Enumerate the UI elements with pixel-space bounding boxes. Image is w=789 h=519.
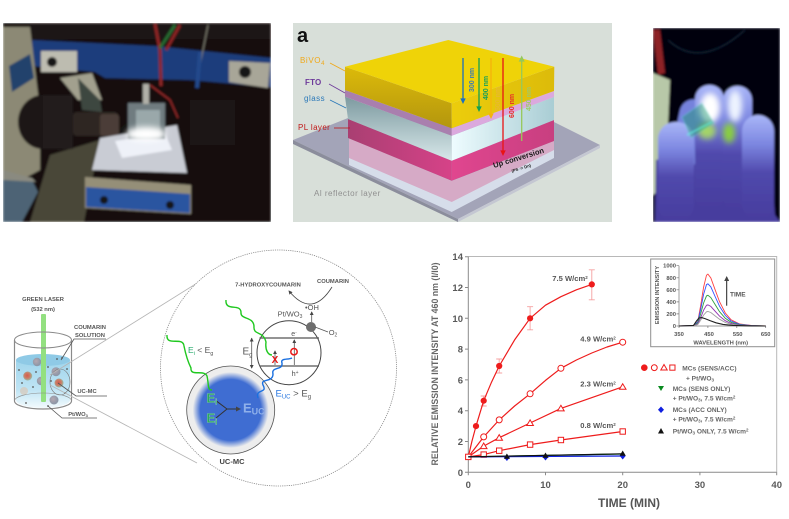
label: Ei less than Eg: E bbox=[188, 345, 195, 357]
inset y ticks: 200 bbox=[666, 312, 676, 318]
legend: , 7.5 W/cm bbox=[701, 396, 733, 402]
reflection of stack bbox=[349, 138, 554, 212]
y axis ticks: 12 bbox=[452, 283, 463, 294]
label: EUC greater than Eg: E bbox=[276, 388, 291, 400]
UC-MC microcapsule: i bbox=[215, 418, 217, 426]
series labels: 0.8 W/cm bbox=[580, 421, 613, 430]
inset x ticks: 550 bbox=[733, 332, 743, 338]
series: 4.9 W/cm2 bbox=[468, 339, 626, 457]
label: Pt/WO3: Pt/WO bbox=[278, 310, 300, 318]
x axis title: TIME (MIN) bbox=[598, 496, 660, 510]
photo: gloved hand with glowing film bbox=[653, 28, 780, 222]
Pt/WO3 particle with bands bbox=[242, 312, 328, 385]
UC-MC microcapsule: i bbox=[215, 398, 217, 406]
series labels: 7.5 W/cm bbox=[552, 274, 585, 283]
panel letter a: a bbox=[297, 25, 309, 47]
legend: 3 bbox=[698, 398, 701, 402]
y axis ticks: 14 bbox=[452, 252, 464, 263]
inset spectra curves bbox=[679, 274, 766, 326]
label: Ei less than Eg: < E bbox=[195, 345, 211, 355]
series labels: 2 bbox=[585, 275, 588, 280]
legend: MCs (SENS ONLY) bbox=[673, 386, 730, 393]
label: FTO: FTO bbox=[305, 78, 321, 87]
red O bbox=[291, 348, 297, 355]
x axis ticks: 20 bbox=[617, 480, 628, 491]
zoom projection lines bbox=[50, 280, 202, 463]
series labels: 2 bbox=[613, 336, 616, 340]
Pt/WO3 particle with bands: - bbox=[295, 330, 297, 335]
line chart: relative emission intensity bbox=[430, 252, 782, 510]
glass outline bbox=[14, 332, 72, 409]
chart frame and axes bbox=[465, 256, 777, 475]
legend: 3 bbox=[711, 378, 714, 382]
UC-MC microcapsule: E bbox=[243, 400, 252, 416]
label: time: TIME bbox=[730, 292, 746, 298]
label: EUC greater than Eg: g bbox=[308, 394, 311, 400]
label: green laser bbox=[22, 297, 65, 313]
x axis ticks: 40 bbox=[771, 480, 782, 491]
inset y ticks bbox=[663, 264, 676, 330]
inset y ticks: 0 bbox=[673, 324, 676, 330]
arrows: wavelength bbox=[461, 57, 524, 154]
label: coumarin: COUMARIN bbox=[317, 279, 349, 285]
label: coumarin solution: COUMARIN bbox=[74, 325, 106, 331]
magnified circle: mechanism bbox=[160, 250, 396, 486]
legend: ONLY, 7.5 W/cm bbox=[695, 428, 746, 436]
arrow labels: 400 nm bbox=[483, 76, 490, 100]
Pt/WO3 particle with bands: e bbox=[291, 331, 295, 338]
photo: laser cell setup on hot plate bbox=[3, 23, 271, 222]
legend: + Pt/WO bbox=[673, 416, 698, 424]
label: Al reflector layer: Al reflector layer bbox=[314, 189, 381, 198]
legend: 2 bbox=[733, 394, 736, 400]
y axis ticks: 6 bbox=[458, 376, 463, 386]
series labels: 2 bbox=[613, 380, 616, 386]
inset x ticks: 450 bbox=[704, 332, 714, 338]
label: 7-hydroxycoumarin: 7-HYDROXYCOUMARIN bbox=[235, 282, 301, 288]
legend: 2 bbox=[733, 416, 736, 420]
microcapsule particles bbox=[18, 357, 68, 407]
y axis title: RELATIVE EMISSION INTENSITY AT 460 nm (I/I0) bbox=[430, 262, 440, 466]
legend: 3 bbox=[692, 430, 695, 436]
wavy green beam to UC-MC bbox=[167, 335, 212, 390]
legend: Pt/WO bbox=[673, 428, 692, 436]
label: UC-MC: UC-MC bbox=[220, 457, 245, 466]
legend: + Pt/WO bbox=[686, 376, 711, 382]
green laser beam bbox=[41, 314, 46, 402]
legend bbox=[641, 364, 749, 436]
legend: , 7.5 W/cm bbox=[701, 416, 733, 424]
inset emission spectra chart bbox=[651, 259, 775, 347]
wavy green beam to Pt/WO3 bbox=[226, 300, 272, 355]
label: Ei less than Eg: g bbox=[210, 351, 213, 357]
time arrow bbox=[726, 277, 728, 306]
arrow labels: 450 nm bbox=[526, 87, 533, 111]
series labels: 2 bbox=[613, 422, 616, 427]
Pt/WO3 particle with bands: + bbox=[296, 370, 299, 376]
series labels: 2.3 W/cm bbox=[580, 380, 613, 388]
panel a: layered device diagram bbox=[293, 23, 612, 222]
label: up conversion: Up conversion bbox=[492, 146, 545, 170]
label: Pt/WO3: 3 bbox=[300, 314, 303, 320]
label: green laser: (532 nm) bbox=[31, 307, 55, 313]
series: 0.8 W/cm2 bbox=[466, 429, 625, 460]
leader lines bbox=[329, 63, 350, 128]
series: 2.3 W/cm2 bbox=[468, 384, 626, 457]
UC-MC microcapsule: E bbox=[206, 410, 215, 426]
label: PS to Dn: (PS -> Dn) bbox=[511, 163, 532, 173]
y axis ticks: 2 bbox=[458, 437, 463, 448]
UC-MC microcapsule: E bbox=[206, 390, 215, 406]
inset x ticks: 650 bbox=[761, 332, 771, 338]
Pt/WO3 particle with bands: h bbox=[291, 369, 296, 378]
Pt/WO3 particle with bands: g bbox=[249, 352, 253, 358]
inset y ticks: 400 bbox=[666, 300, 676, 306]
layer stack bbox=[345, 40, 554, 181]
arrow: coumarin conversion bbox=[289, 287, 332, 304]
y axis ticks bbox=[452, 252, 464, 479]
x axis ticks: 0 bbox=[466, 480, 471, 491]
inset y title: EMISSION INTENSITY bbox=[655, 266, 661, 324]
legend: MCs (SENS/ACC) bbox=[682, 366, 737, 372]
beaker leader lines bbox=[48, 339, 107, 418]
series: 7.5 W/cm2 bbox=[468, 281, 595, 457]
series labels: 4.9 W/cm bbox=[580, 334, 613, 344]
label: glass: glass bbox=[304, 94, 325, 103]
series labels bbox=[552, 274, 616, 430]
y axis ticks: 4 bbox=[458, 406, 464, 417]
error bars bbox=[481, 270, 595, 406]
UC-MC microcapsule: UC bbox=[252, 406, 265, 416]
x axis ticks bbox=[466, 480, 782, 491]
water bbox=[16, 354, 70, 408]
red X: X bbox=[272, 355, 279, 366]
Al reflector plate bbox=[293, 118, 600, 222]
Pt/WO3 particle with bands: E bbox=[242, 346, 249, 358]
y axis ticks: 0 bbox=[458, 468, 463, 479]
beaker schematic bbox=[14, 297, 107, 418]
y axis ticks: 10 bbox=[452, 314, 463, 325]
inset x ticks: 350 bbox=[674, 332, 684, 338]
label: EUC greater than Eg: UC bbox=[282, 394, 291, 400]
label: BiVO4: 4 bbox=[321, 61, 325, 67]
label: hydroxyl radical: •OH bbox=[305, 303, 319, 312]
inset x ticks bbox=[674, 332, 771, 338]
label: Pt/WO3: Pt/WO bbox=[68, 412, 86, 418]
control series: sens only, acc only, catalyst only bbox=[468, 450, 626, 461]
inset y ticks: 1000 bbox=[663, 264, 676, 270]
label: PL layer: PL layer bbox=[298, 123, 330, 132]
label: UC-MC: UC-MC bbox=[77, 389, 97, 395]
label: green laser: GREEN LASER bbox=[22, 297, 65, 303]
label: O2: 2 bbox=[335, 332, 338, 338]
UC-MC microcapsule bbox=[187, 366, 275, 454]
y axis ticks: 8 bbox=[458, 344, 463, 356]
legend: 2 bbox=[746, 428, 749, 432]
legend: 3 bbox=[698, 418, 701, 424]
label: EUC greater than Eg: > E bbox=[291, 388, 308, 400]
inset y ticks: 600 bbox=[666, 288, 676, 294]
label: coumarin solution bbox=[74, 325, 106, 339]
x axis ticks: 10 bbox=[540, 480, 551, 491]
label: coumarin solution: SOLUTION bbox=[75, 333, 105, 339]
arrow labels: 500 nm bbox=[495, 87, 502, 111]
arrow labels bbox=[469, 68, 533, 118]
label: O2: O bbox=[329, 328, 335, 337]
inset y ticks: 800 bbox=[666, 276, 676, 282]
inset x title: WAVELENGTH (nm) bbox=[693, 340, 748, 346]
label: Ei less than Eg: i bbox=[194, 351, 195, 357]
wavy blue emission bbox=[258, 358, 292, 398]
x axis ticks: 30 bbox=[695, 480, 705, 491]
arrow labels: 600 nm bbox=[509, 94, 516, 118]
label: BiVO4: BiVO bbox=[300, 56, 321, 65]
legend: + Pt/WO bbox=[673, 396, 698, 402]
arrow labels: 300 nm bbox=[469, 68, 476, 92]
legend: MCs (ACC ONLY) bbox=[673, 407, 727, 414]
highlighted particle ring bbox=[50, 369, 70, 395]
label: Pt/WO3: 3 bbox=[86, 413, 89, 418]
